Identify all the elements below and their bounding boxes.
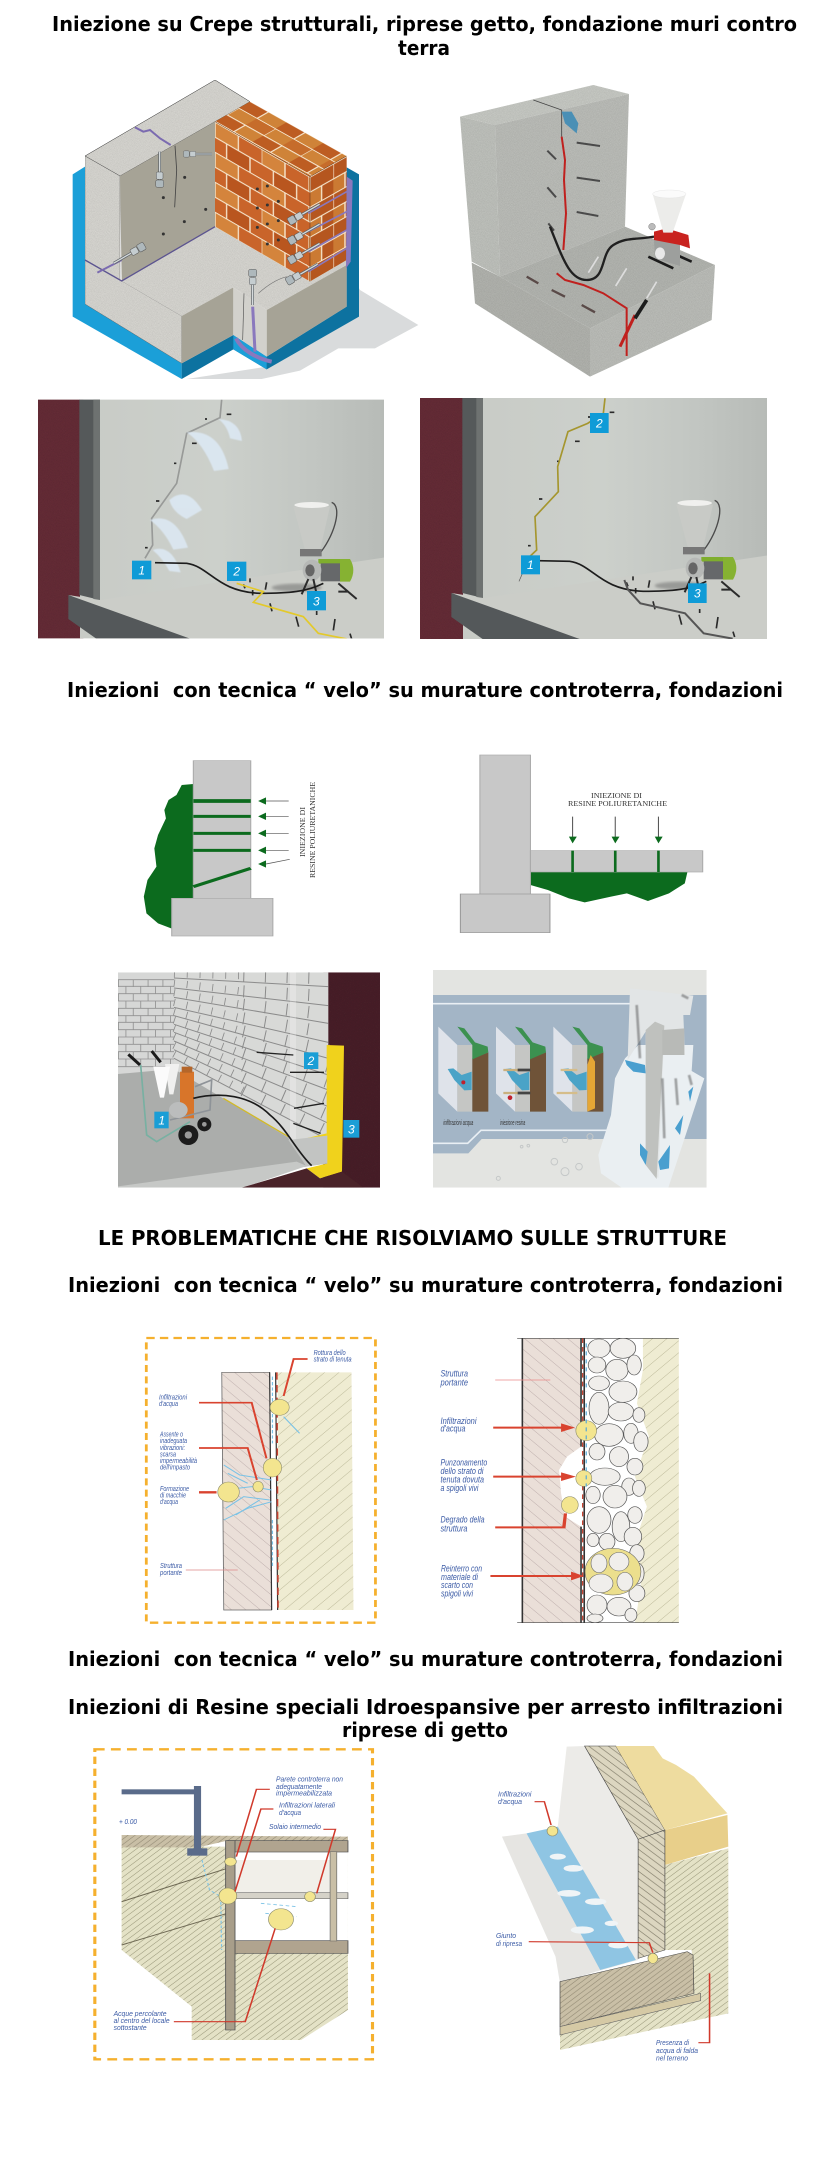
label: giunto: di ripresa (496, 1939, 522, 1948)
badge 2: 2 (232, 565, 240, 579)
label: acque (113, 2009, 170, 2032)
floor crack (624, 580, 733, 639)
defect circles (219, 1857, 315, 1930)
hose (155, 563, 323, 593)
blue patches (625, 1060, 693, 1170)
defect circles (561, 1421, 597, 1513)
injectors (257, 1052, 324, 1133)
floor (118, 1069, 307, 1188)
label: infiltrazioni (159, 1392, 187, 1408)
photo: water infiltrating through crack (30, 395, 390, 648)
wall injectors (547, 143, 600, 231)
column (226, 1841, 235, 2030)
yellow crack (237, 583, 347, 639)
label: assente: impermeabilità (160, 1456, 197, 1465)
structural wall (522, 1338, 581, 1623)
bubbles (496, 1134, 593, 1180)
water traces (202, 1860, 297, 1950)
cast shadow (187, 267, 418, 379)
illustration: three injection stages and wall detail: iniezione resina (500, 1118, 525, 1127)
label: falda (656, 2038, 698, 2063)
resin mass (530, 872, 687, 902)
stones in circle (585, 1548, 641, 1595)
badge 3: 3 (313, 595, 320, 609)
dashed frame (146, 1338, 375, 1623)
grey crack (145, 400, 222, 558)
badge 1: 1 (138, 563, 145, 577)
badge 2 (590, 413, 609, 433)
dashed frame (95, 1749, 373, 2059)
title: crepe strutturali (52, 12, 797, 60)
label: struttura: portante (159, 1568, 182, 1577)
label: infiltrazioni (498, 1790, 532, 1806)
label: parete (276, 1775, 343, 1798)
badge 1: 1 (527, 558, 534, 572)
label: degrado: struttura (440, 1524, 468, 1534)
soil layer (665, 1815, 728, 1865)
background (433, 970, 707, 1188)
label: punzonamento (440, 1458, 487, 1493)
room (227, 1841, 348, 1953)
brown ground (242, 1168, 363, 1188)
purple cracks and sealing (85, 127, 353, 362)
stage 2 (496, 1027, 546, 1112)
concrete block (288, 1136, 327, 1167)
label: giunto: Giunto (496, 1931, 516, 1940)
hose (193, 1095, 312, 1166)
water band (527, 1827, 636, 1970)
title: resine idroespansive: Iniezioni di Resine speciali Idroespansive per arresto infiltrazioni (68, 1695, 783, 1719)
badge 3: 3 (694, 587, 701, 601)
diagram: wall section with resin injection (144, 761, 317, 936)
brick wall (215, 102, 347, 282)
label: assente: dell'impasto (160, 1462, 190, 1472)
label: infiltrazioni: d'acqua (498, 1797, 522, 1806)
badge 2 (304, 1052, 318, 1069)
badge 2: 2 (307, 1054, 315, 1068)
water drops (585, 1343, 588, 1487)
hose (538, 561, 706, 591)
label: laterali (279, 1801, 335, 1817)
defect circles (547, 1826, 658, 1963)
soil body (560, 1848, 728, 2050)
band lines (433, 1004, 638, 1143)
label: struttura: Struttura (160, 1561, 182, 1570)
base (472, 227, 715, 377)
diagram: slab section with resin injection (460, 755, 703, 933)
label: parete: impermeabilizzata (276, 1789, 332, 1798)
inner wall (120, 122, 215, 281)
water jets (150, 419, 242, 572)
title: resine idroespansive (68, 1695, 783, 1742)
lower faces (182, 287, 233, 363)
label: falda: nel terreno (656, 2054, 688, 2063)
label: infiltrazioni: d'acqua (440, 1424, 466, 1434)
diagram: backfill with sharp stones (440, 1338, 679, 1623)
label: infiltrazioni: Infiltrazioni (159, 1392, 187, 1401)
column (646, 1022, 664, 1179)
label: rottura (314, 1348, 352, 1364)
diagram: foundation joint perspective (496, 1746, 728, 2063)
label: parete: adeguatamente (276, 1782, 322, 1791)
hose (550, 227, 654, 280)
injection cart (128, 1051, 212, 1145)
upper slab (122, 1835, 348, 1847)
caption 1: infiltrazioni acqua (443, 1118, 473, 1127)
label: acque: sottostante (114, 2023, 147, 2032)
label: assente: scarsa (160, 1450, 176, 1459)
arrows (569, 817, 663, 843)
rotated label: INIEZIONE DI (298, 806, 307, 857)
rotated label: RESINE POLIURETANICHE (308, 782, 317, 878)
scene background (30, 395, 390, 648)
label: formazione (160, 1484, 189, 1506)
side wall (172, 972, 330, 1140)
waterproof shell (73, 167, 182, 379)
resin mass (144, 784, 193, 929)
label: punzonamento: dello strato di (440, 1466, 484, 1476)
sealed crack (530, 398, 605, 557)
label: struttura: portante (440, 1378, 468, 1388)
badge 1 (132, 561, 151, 579)
floor lip (118, 1162, 307, 1188)
label: quota: + 0.00 (119, 1817, 138, 1826)
resin injections (193, 801, 251, 887)
photo: brick wall with injection cart (118, 970, 380, 1188)
back wall (118, 972, 175, 1074)
band highlights (550, 1854, 628, 1948)
label: acque: al centro del locale (114, 2016, 170, 2025)
label: degrado (440, 1515, 484, 1534)
label: parete: Parete controterra non (276, 1775, 343, 1784)
illustration: concrete wall with red crack and pump (460, 85, 715, 377)
concrete top (85, 80, 250, 176)
membrane (502, 1833, 600, 1983)
label: laterali: Infiltrazioni laterali (279, 1801, 335, 1810)
hairline branch (518, 574, 522, 582)
cracks (533, 100, 635, 356)
red leaders (529, 1802, 710, 2043)
title: crepe strutturali: Iniezione su Crepe strutturali, riprese getto, fondazione muri contro (52, 12, 797, 36)
badge 3 (688, 583, 707, 603)
pump (648, 190, 692, 268)
label: laterali: d'acqua (279, 1808, 301, 1817)
label: punzonamento: Punzonamento (440, 1458, 487, 1468)
title: crepe strutturali: terra (398, 36, 450, 60)
illustration: three injection stages and wall detail (433, 970, 707, 1188)
label: punzonamento: tenuta dovuta (440, 1475, 484, 1485)
label: rottura: strato di tenuta (314, 1355, 352, 1364)
label: infiltrazioni: Infiltrazioni (440, 1416, 477, 1426)
wall top (460, 85, 629, 125)
stage 3 (553, 1027, 603, 1112)
footing (172, 898, 273, 936)
membrane (270, 1372, 278, 1610)
drill holes (163, 177, 278, 244)
label: RESINE POLIURETANICHE (568, 799, 667, 808)
label: struttura: Struttura (440, 1369, 468, 1379)
label: acque: Acque percolante (113, 2009, 167, 2018)
injections (573, 851, 658, 872)
dark streaks (637, 995, 692, 1138)
lean concrete (560, 1993, 701, 2035)
label: reinterro (441, 1564, 482, 1599)
wall front (495, 94, 629, 277)
label: reinterro: spigoli vivi (441, 1589, 474, 1599)
diagram: water infiltration causes, dashed box (146, 1338, 375, 1623)
badge 1: 1 (158, 1113, 165, 1127)
label (568, 791, 667, 808)
badge 3 (307, 591, 326, 610)
label: assente (159, 1430, 197, 1472)
stones (586, 1338, 648, 1623)
label: INIEZIONE DI (591, 791, 643, 800)
wall cut (638, 1830, 665, 1958)
title: tecnica velo: Iniezioni con tecnica “ velo” su murature controterra, fondazioni (67, 678, 783, 702)
plaster mass (598, 1045, 704, 1188)
badge 1 (154, 1112, 169, 1128)
badge 1 (521, 555, 540, 574)
wall face (558, 1746, 638, 1982)
wall lines (517, 1338, 679, 1623)
label: infiltrazioni (440, 1416, 477, 1434)
illustration: isometric wall with injectors (73, 80, 418, 379)
scene background (413, 393, 773, 646)
blue band (433, 995, 707, 1153)
strata lines (122, 1868, 227, 1945)
arrows (258, 797, 290, 868)
water tendrils (224, 1377, 300, 1567)
label: rottura: Rottura dello (314, 1348, 346, 1357)
label: reinterro: materiale di (441, 1572, 479, 1582)
label: formazione: Formazione (160, 1484, 189, 1493)
soil (635, 1338, 679, 1623)
floor injectors (588, 257, 657, 298)
stage 1 (438, 1027, 488, 1112)
red arrows (490, 1423, 584, 1580)
slab (530, 851, 703, 872)
floor slab (122, 227, 347, 316)
photo: crack sealed with resin (413, 393, 773, 646)
label: degrado: Degrado della (440, 1515, 484, 1525)
label: infiltrazioni: Infiltrazioni (498, 1790, 532, 1799)
wall (193, 761, 251, 898)
label: reinterro: scarto con (441, 1580, 473, 1590)
label: formazione: di macchie (160, 1491, 186, 1500)
label: punzonamento: a spigoli vivi (440, 1483, 479, 1493)
label: assente: vibrazioni: (160, 1443, 185, 1452)
brown soil (323, 972, 380, 1188)
title: tecnica velo second: Iniezioni con tecnica “ velo” su murature controterra, fondazioni (68, 1273, 783, 1297)
back panel (628, 988, 693, 1178)
wall side (460, 117, 500, 277)
yellow membrane (223, 1045, 344, 1178)
badge 2: 2 (595, 416, 603, 430)
title: resine idroespansive: riprese di getto (342, 1718, 508, 1742)
wall section top (585, 1746, 665, 1839)
soil top (616, 1746, 727, 1830)
structural wall (222, 1372, 272, 1610)
title: tecnica velo third: Iniezioni con tecnica “ velo” su murature controterra, fondazioni (68, 1647, 783, 1671)
label: reinterro: Reinterro con (441, 1564, 482, 1574)
label: struttura (440, 1369, 468, 1388)
wall (480, 755, 530, 895)
label: falda: acqua di falda (656, 2046, 698, 2055)
concrete left face (85, 156, 182, 363)
red arrows (199, 1359, 308, 1492)
label: assente: Assente o (159, 1430, 183, 1439)
footing (560, 1952, 694, 2027)
label: formazione: d'acqua (160, 1497, 178, 1506)
footing (460, 894, 550, 933)
rotated label (298, 782, 317, 878)
badge 3: 3 (348, 1122, 355, 1136)
badge 3 (343, 1120, 359, 1138)
label: solaio: Solaio intermedio (269, 1822, 321, 1831)
water splash (562, 112, 578, 133)
badge 2 (227, 562, 246, 581)
red leaders (174, 1789, 335, 2022)
diagram: basement section, dashed box (95, 1749, 373, 2059)
membrane (581, 1338, 584, 1623)
label: struttura (159, 1561, 182, 1577)
leader line (186, 1569, 238, 1571)
label: falda: Presenza di (656, 2038, 689, 2047)
label: infiltrazioni: d'acqua (159, 1399, 178, 1408)
leader line (495, 1379, 550, 1381)
heading: problematiche: LE PROBLEMATICHE CHE RISOLVIAMO SULLE STRUTTURE (98, 1226, 727, 1250)
blue structure (122, 1786, 207, 1856)
label: giunto (496, 1931, 522, 1948)
soil (278, 1372, 353, 1610)
injectors (112, 151, 322, 305)
defect circles (218, 1399, 289, 1502)
label: assente: inadeguata (160, 1436, 187, 1445)
soil (122, 1847, 348, 2040)
